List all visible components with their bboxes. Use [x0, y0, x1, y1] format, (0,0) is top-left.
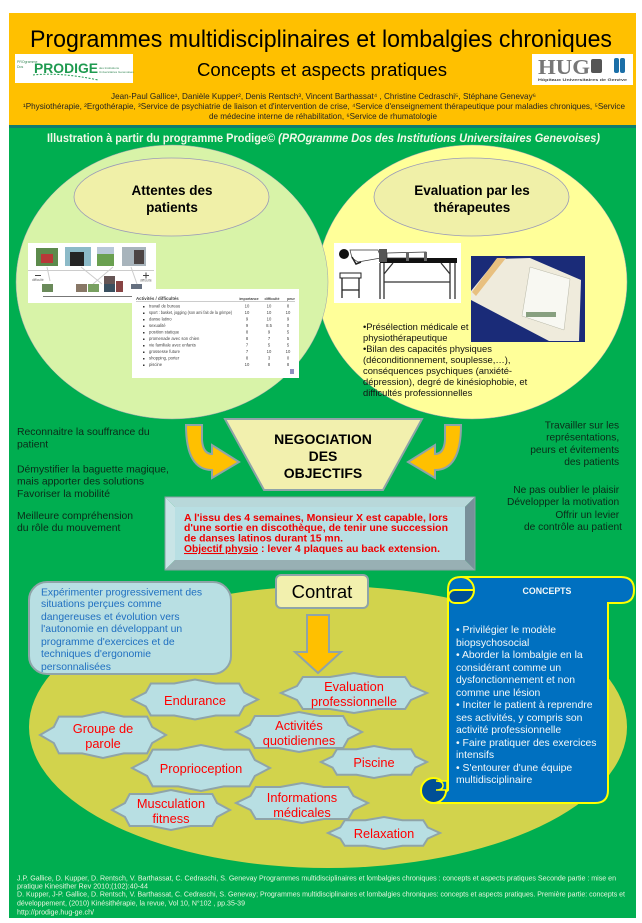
star: discussion group: Groupe de: [73, 721, 133, 736]
star: medical information: médicales: [273, 805, 331, 820]
panel: patient expectations: [16, 145, 328, 419]
photo: evaluation binder: [471, 256, 585, 342]
panel: concepts scroll: • Privilégier le modèle: [456, 625, 556, 636]
star: muscle training: Musculation: [137, 796, 205, 811]
heading: attentes: patients: [146, 200, 198, 215]
heading: attentes: Attentes des: [131, 183, 213, 198]
table: activities and difficulties: piscine: [149, 362, 163, 367]
goal box: d'une sortie en discothèque, de tenir une succession: [184, 522, 448, 534]
table: activities and difficulties: 10: [267, 316, 272, 322]
table: activities and difficulties: 10: [245, 304, 250, 308]
text: right recommendations: Travailler sur les: [545, 420, 619, 432]
panel: concepts scroll: CONCEPTS: [523, 586, 572, 596]
table: activities and difficulties: 9: [246, 316, 249, 322]
heading: evaluation: thérapeutes: [434, 200, 510, 215]
bottom curl: [421, 778, 446, 803]
logo: Prodige: PRODIGE: [34, 61, 98, 76]
goal box: : lever 4 plaques au back extension.: [261, 543, 440, 555]
table: activities and difficulties: [132, 289, 299, 378]
text: evaluation criteria: •Bilan des capacités physiques: [363, 343, 492, 354]
authors and affiliations: Jean-Paul Gallice¹, Danièle Kupper², Denis Rentsch³, Vincent Barthassat⁴ , Christine Cedraschi⁵, Stéphane Genevay⁶: [111, 91, 536, 101]
goal box: de danses latinos durant 15 mn.: [184, 532, 343, 544]
star: professional evaluation: professionnelle: [311, 694, 397, 709]
table: activities and difficulties: danse latino: [149, 316, 172, 322]
star: medical information: Informations: [267, 790, 337, 805]
table: activities and difficulties: 3: [268, 356, 271, 360]
callout: progressive experimentation: personnalisées: [41, 662, 111, 673]
text: evaluation criteria: physiothérapeutique: [363, 332, 447, 343]
star: relaxation: Relaxation: [354, 826, 414, 841]
table: activities and difficulties: 10: [267, 310, 272, 315]
authors and affiliations: de médecine interne de réhabilitation, ⁶Service de rhumatologie: [209, 111, 437, 121]
panel: concepts scroll: • Inciter le patient à reprendre: [456, 700, 593, 711]
goal box: Objectif physio: [184, 543, 258, 555]
table: activities and difficulties: 10: [245, 362, 250, 367]
table: activities and difficulties: sexualité: [149, 323, 166, 328]
references footer: http://prodige.hug-ge.ch/: [17, 908, 95, 916]
header band: [9, 13, 636, 128]
table: activities and difficulties: 9: [268, 330, 271, 334]
text: evaluation criteria: conséquences psychiques (anxiété-: [363, 365, 512, 376]
panel: concepts scroll: considérant comme un: [456, 663, 561, 674]
table: activities and difficulties: 9: [287, 316, 290, 322]
panel: concepts scroll: ses activités, y compris son: [456, 713, 583, 724]
text: evaluation criteria: (déconditionnement, souplesse,…),: [363, 354, 510, 365]
star: daily activities: Activités: [275, 718, 323, 733]
text: right recommendations: représentations,: [546, 432, 619, 444]
text: left recommendations: Reconnaitre la souffrance du: [17, 427, 150, 438]
negotiation trapezoid: OBJECTIFS: [284, 465, 362, 481]
star: proprioception: [132, 745, 270, 791]
table: activities and difficulties: shopping, porter: [149, 356, 180, 360]
logo: Prodige: des Institutions: [99, 66, 120, 70]
table: activities and difficulties: 8: [246, 356, 249, 360]
photo difficulty scale: difficulté: [140, 278, 152, 282]
illustration: patient on examination table: [334, 243, 461, 303]
logo: HUG: [532, 54, 633, 85]
logo: HUG: HUG: [538, 55, 590, 79]
table: activities and difficulties: 10: [286, 310, 291, 315]
references footer: pratique Kinesither Rev 2010;(102):40-44: [17, 882, 148, 890]
panel: therapist evaluation: [317, 145, 627, 419]
panel: concepts scroll: dysfonctionnement et non: [456, 675, 575, 686]
table: activities and difficulties: 10: [245, 310, 250, 315]
text: evaluation criteria: dépression), degré de kinésiophobie, et: [363, 376, 528, 387]
text: left recommendations: patient: [17, 440, 48, 450]
panel: concepts scroll: comme une lésion: [456, 688, 541, 699]
arrow: right curved: [408, 425, 461, 478]
text: left recommendations: Favoriser la mobilité: [17, 489, 110, 500]
table: activities and difficulties: 5: [287, 330, 290, 334]
authors and affiliations: ¹Physiothérapie, ²Ergothérapie, ³Service de psychiatrie de liaison et d'intervention de crise, ⁴Service d'enseignement thérapeutique pour maladies chroniques, ⁵Service: [23, 101, 625, 111]
table: activities and difficulties: 10: [267, 349, 272, 354]
star: proprioception: Proprioception: [160, 761, 242, 776]
references footer: développement, (2010) Kinésithérapie, la revue, Vol 10, N°102 , pp.35-39: [17, 898, 245, 908]
table: activities and difficulties: sport : basket, jogging (son ami fait de la grimpe): [149, 310, 233, 315]
text: right recommendations: Offrir un levier: [555, 510, 620, 521]
star: endurance: Endurance: [164, 693, 226, 708]
arrow: left curved: [186, 425, 239, 478]
goal box: [165, 497, 475, 570]
panel: concepts scroll: biopsychosocial: [456, 638, 529, 649]
callout: progressive experimentation: situations perçues comme: [41, 599, 162, 610]
panel: concepts scroll: [421, 577, 634, 803]
logo: Prodige: PROgramme: [17, 60, 37, 64]
star: discussion group: [40, 712, 166, 758]
callout: progressive experimentation: dangereuses et évolution vers: [41, 612, 180, 623]
table: activities and difficulties: 5: [287, 336, 290, 341]
callout: progressive experimentation: programme d'exercices et de: [41, 637, 175, 648]
panel: concepts scroll: intensifs: [456, 750, 494, 761]
text: right recommendations: Ne pas oublier le plaisir: [513, 485, 620, 496]
text: left recommendations: du rôle du mouvement: [17, 523, 121, 534]
references footer: J.P. Gallice, D. Kupper, D. Rentsch, V. Barthassat, C. Cedraschi, S. Genevay Programmes multidisciplinaires et lombalgies chroniques : concepts et aspects pratiques Seconde partie : mise en: [17, 874, 616, 882]
contract box: Contrat: [292, 581, 352, 602]
table: activities and difficulties: 8.5: [266, 323, 273, 328]
text: left recommendations: Meilleure compréhension: [17, 511, 133, 522]
text: left recommendations: Démystifier la baguette magique,: [17, 464, 169, 476]
panel: concepts scroll: • S'entourer d'une équipe: [456, 763, 572, 774]
star: pool: Piscine: [353, 755, 395, 770]
table: activities and difficulties: 7: [246, 349, 249, 354]
negotiation trapezoid: NEGOCIATION: [274, 431, 372, 447]
text: right recommendations: des patients: [564, 457, 619, 468]
table: activities and difficulties: 7: [268, 336, 271, 341]
table top and legs: [380, 258, 457, 263]
heading: evaluation: Evaluation par les: [414, 183, 530, 198]
star: pool: [321, 746, 427, 778]
star: muscle training: fitness: [152, 811, 190, 826]
panel: concepts scroll: multidisciplinaire: [456, 775, 532, 786]
callout: progressive experimentation: Expérimenter progressivement des: [41, 588, 202, 598]
table: activities and difficulties: 5: [287, 342, 290, 348]
table: activities and difficulties: 9: [246, 323, 249, 328]
star: daily activities: quotidiennes: [263, 733, 335, 748]
table: activities and difficulties: 0: [287, 356, 290, 360]
negotiation trapezoid: [225, 419, 422, 490]
photo difficulty scale: [28, 243, 156, 303]
panel: contract ellipse: [29, 586, 627, 868]
star: professional evaluation: [281, 673, 427, 713]
table: activities and difficulties: 7: [246, 342, 249, 348]
contract box: [276, 575, 368, 608]
star: endurance: [132, 680, 258, 720]
table: activities and difficulties: importance: [239, 297, 259, 301]
text: left recommendations: mais apporter des solutions: [17, 476, 144, 488]
panel: concepts scroll: • Aborder la lombalgie en la: [456, 650, 583, 661]
star: professional evaluation: Evaluation: [324, 679, 384, 694]
scroll body: [433, 577, 634, 803]
callout: progressive experimentation: [29, 582, 231, 674]
star: muscle training: [112, 790, 230, 830]
table: activities and difficulties: 8: [287, 362, 290, 367]
callout: progressive experimentation: techniques d'ergonomie: [41, 649, 151, 660]
title: Programmes multidisciplinaires et lombalgies chroniques: [30, 26, 612, 53]
star: relaxation: [328, 817, 440, 849]
table: activities and difficulties: position statique: [149, 330, 180, 334]
text: evaluation criteria: difficultés professionnelles: [363, 387, 473, 398]
patient lying prone: [350, 250, 381, 262]
logo: Prodige: Universitaires Genevoises: [99, 70, 134, 74]
panel: concepts scroll: • Faire pratiquer des exercices: [456, 738, 597, 749]
table: activities and difficulties: 10: [286, 349, 291, 354]
text: right recommendations: Développer la motivation: [507, 497, 619, 508]
table: activities and difficulties: grossesse future: [149, 349, 181, 354]
table: activities and difficulties: difficulté: [265, 297, 279, 301]
table: activities and difficulties: 8: [246, 330, 249, 334]
subtitle: Concepts et aspects pratiques: [197, 59, 447, 80]
star: medical information: [236, 783, 368, 823]
references footer: [17, 874, 625, 916]
text: right recommendations: de contrôle au patient: [524, 522, 622, 533]
negotiation trapezoid: DES: [309, 448, 337, 464]
star: daily activities: [236, 712, 362, 752]
table: activities and difficulties: 5: [268, 342, 271, 348]
table: activities and difficulties: 8: [246, 336, 249, 341]
table: activities and difficulties: 10: [267, 304, 272, 308]
text: right recommendations: peurs et évitements: [530, 445, 619, 456]
logo: HUG: Hôpitaux Universitaires de Genève: [538, 78, 627, 82]
table: activities and difficulties: 8: [287, 304, 290, 308]
table: activities and difficulties: 8: [268, 362, 271, 367]
top curl: [448, 590, 474, 603]
photo difficulty scale: difficulté: [32, 278, 44, 282]
table: activities and difficulties: promenade avec son chien: [149, 336, 200, 341]
panel: concepts scroll: activité professionnelle: [456, 725, 561, 736]
goal box: A l'issu des 4 semaines, Monsieur X est capable, lors: [184, 512, 448, 524]
table: activities and difficulties: 0: [287, 323, 290, 328]
table: activities and difficulties: travail de bureau: [149, 304, 181, 308]
authors and affiliations: [23, 91, 625, 121]
star: discussion group: parole: [85, 736, 121, 751]
section heading: Illustration à partir du programme Prodige© (PROgramme Dos des Institutions Universitaires Genevoises): [47, 133, 600, 145]
callout: progressive experimentation: l'autonomie en développant un: [41, 624, 182, 635]
arrow: down to activities: [295, 615, 341, 673]
stool: [340, 273, 361, 278]
text: evaluation criteria: •Présélection médicale et: [363, 321, 469, 332]
table: activities and difficulties: vie familiale avec enfants: [149, 342, 196, 348]
logo: Prodige: Dos: [17, 65, 23, 69]
logo: Prodige: [15, 54, 134, 83]
table: activities and difficulties: Activités / difficultés: [136, 296, 179, 301]
references footer: D. Kupper, J-P. Gallice, D. Rentsch, V. Barthassat, C. Cedraschi, S. Genevay; Programmes multidisciplinaires et lombalgies chroniques: concepts et aspects pratiques. Première partie: concepts et: [17, 890, 625, 898]
table: activities and difficulties: peur: [287, 297, 295, 301]
